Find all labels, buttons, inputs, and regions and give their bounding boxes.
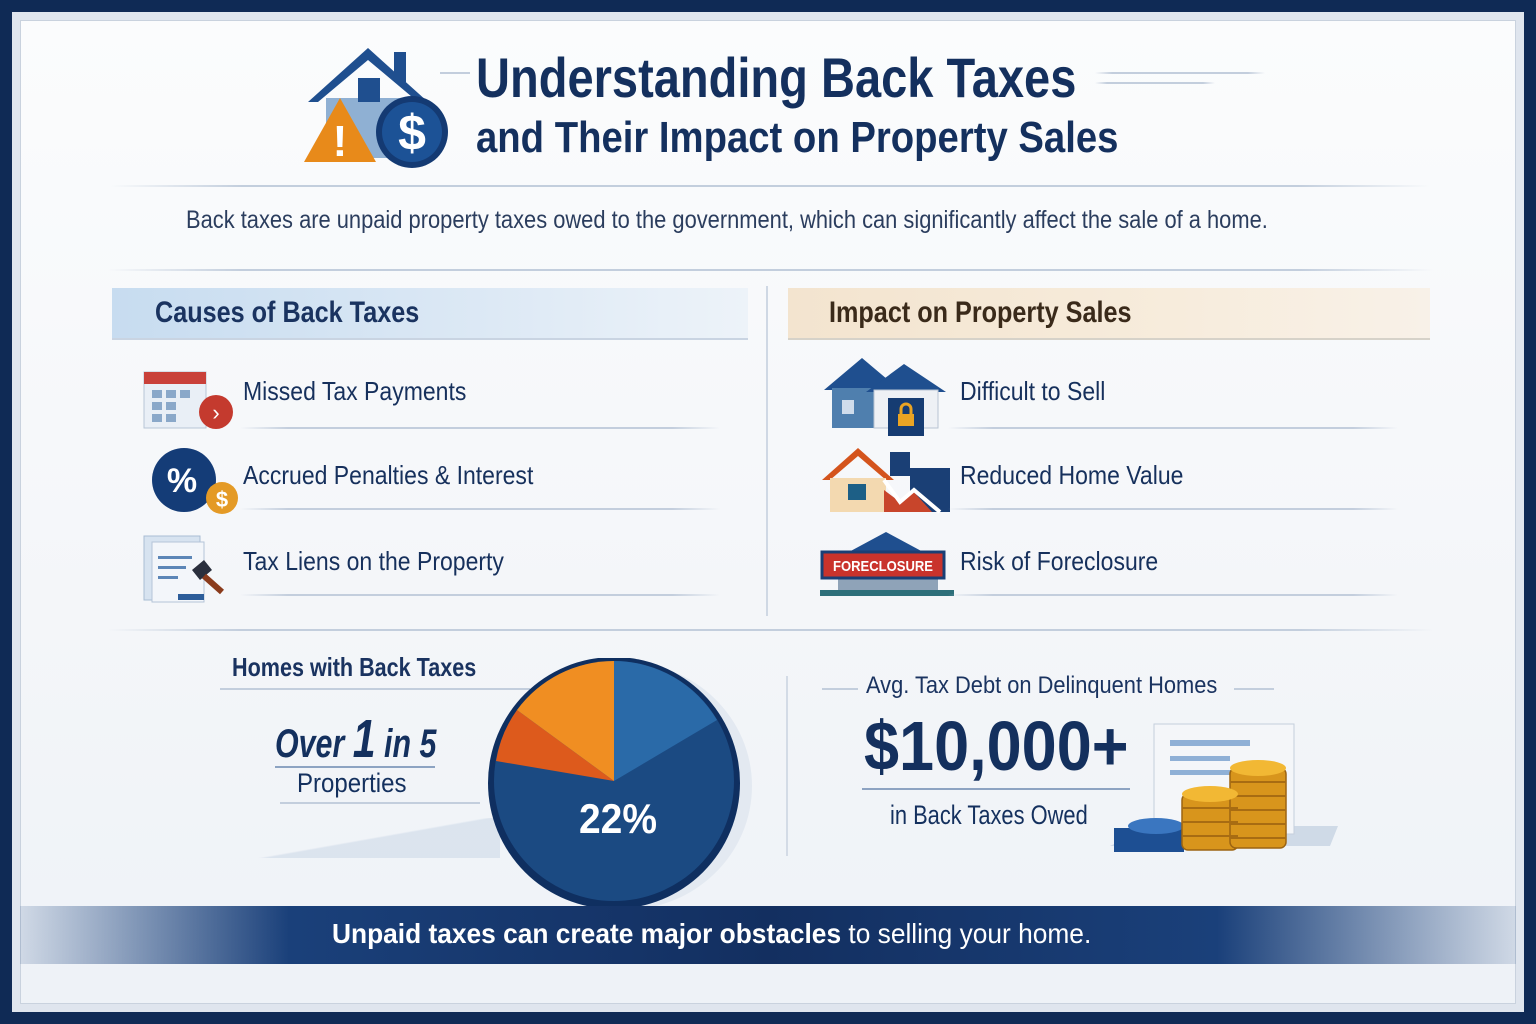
text: difficult: Difficult to Sell xyxy=(960,376,1105,406)
stat: average tax debt xyxy=(822,672,1274,830)
stat: average tax debt: in Back Taxes Owed xyxy=(890,800,1088,830)
icon: foreclosure house xyxy=(820,532,954,596)
icon: locked house xyxy=(824,358,946,436)
stat: homes with back taxes: Homes with Back Taxes xyxy=(232,652,476,682)
text: missed payments: Missed Tax Payments xyxy=(243,376,466,406)
icon: house with warning and dollar xyxy=(304,48,448,168)
icon: calendar: › xyxy=(212,400,220,425)
heading: impact: Impact on Property Sales xyxy=(829,296,1132,329)
stat: homes with back taxes: Over 1 in 5 xyxy=(275,709,436,769)
text: liens: Tax Liens on the Property xyxy=(243,546,504,576)
text: penalties: Accrued Penalties & Interest xyxy=(243,460,533,490)
text: reduced: Reduced Home Value xyxy=(960,460,1183,490)
icon: percent coin xyxy=(152,448,238,514)
title xyxy=(476,46,1118,162)
title: Understanding Back Taxes xyxy=(476,46,1076,109)
icon: percent coin: % xyxy=(167,462,197,500)
heading: causes: Causes of Back Taxes xyxy=(155,296,419,329)
stat: homes with back taxes: Properties xyxy=(297,768,407,798)
icon: percent coin: $ xyxy=(216,487,228,512)
icon: house value drop xyxy=(822,448,950,513)
heading: causes xyxy=(112,288,748,340)
icon: document and gavel xyxy=(144,536,224,602)
stat: average tax debt: Avg. Tax Debt on Delinquent Homes xyxy=(866,672,1217,699)
heading: impact xyxy=(788,288,1430,340)
stat: average tax debt: $10,000+ xyxy=(864,707,1129,785)
panel: causes xyxy=(112,288,748,602)
title: and Their Impact on Property Sales xyxy=(476,113,1118,162)
icon: calendar xyxy=(144,372,233,429)
pie chart: 22% xyxy=(488,658,752,906)
icon: house with warning and dollar: ! xyxy=(333,117,347,166)
icon: document and coins xyxy=(1110,724,1338,852)
banner: bottom message xyxy=(20,906,1516,964)
stat: homes with back taxes xyxy=(220,652,530,804)
pie chart: 22%: 22% xyxy=(579,795,657,842)
text: foreclosure: Risk of Foreclosure xyxy=(960,546,1158,576)
banner: bottom message: Unpaid taxes can create major obstacles to selling your home. xyxy=(332,918,1091,949)
icon: house with warning and dollar: $ xyxy=(398,105,426,161)
subtitle: Back taxes are unpaid property taxes owed to the government, which can significantly affect the sale of a home. xyxy=(186,206,1268,234)
icon: foreclosure house: FORECLOSURE xyxy=(833,558,933,575)
panel: impact xyxy=(788,288,1430,596)
